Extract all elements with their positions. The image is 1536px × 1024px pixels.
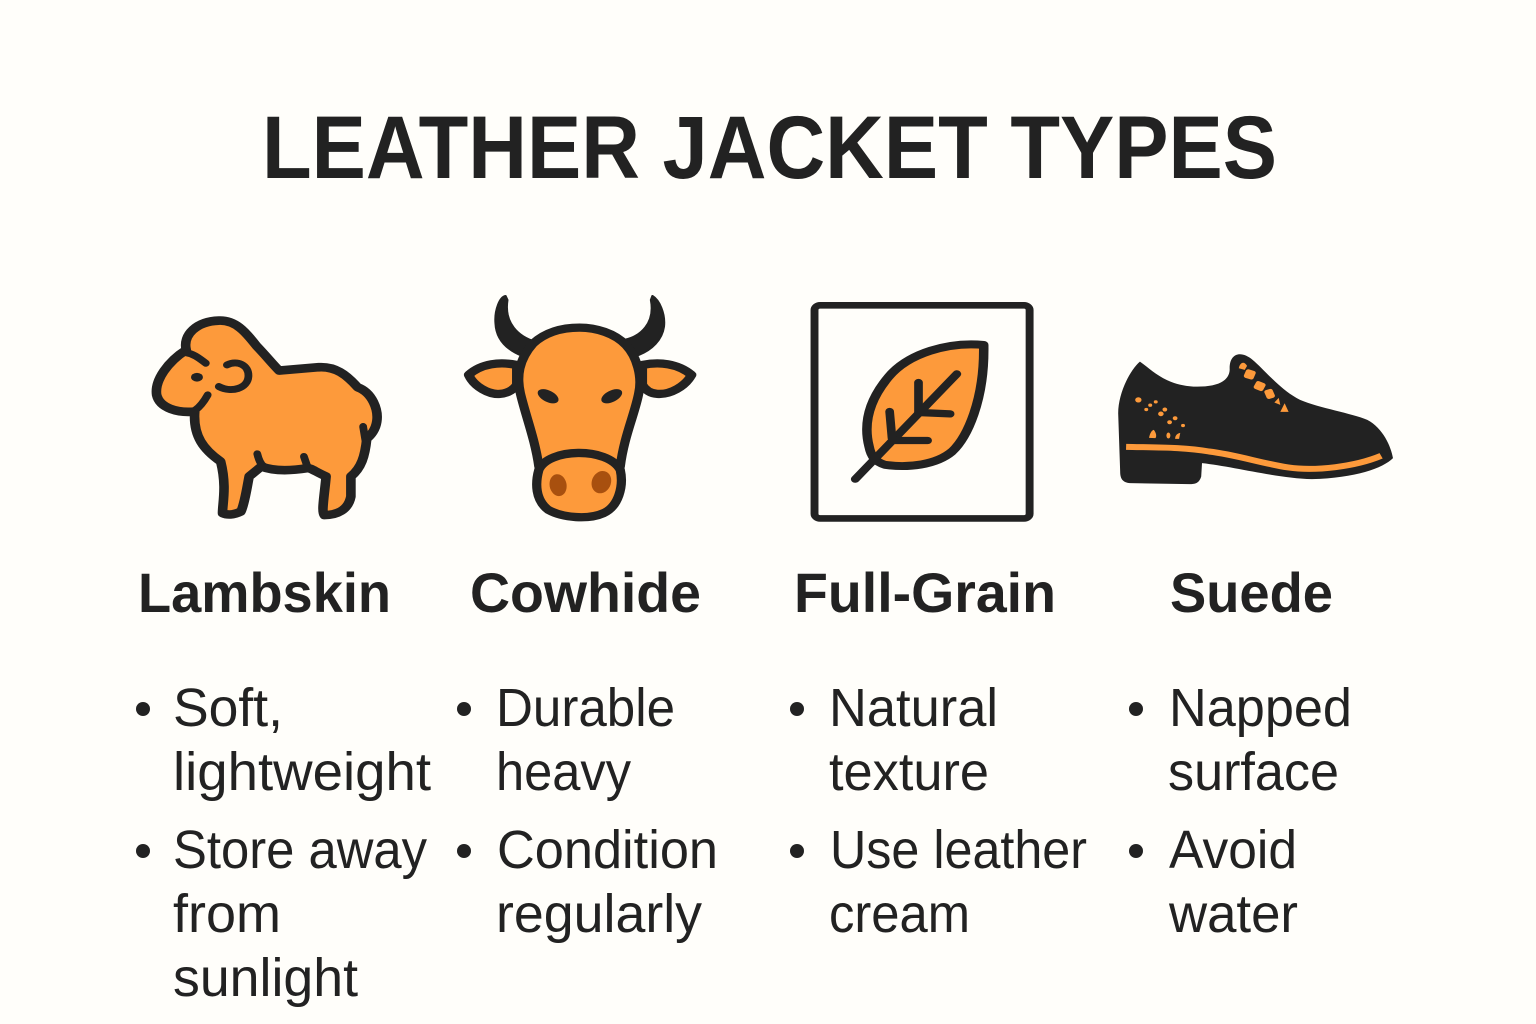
icon: cowhide cow head (469, 296, 692, 517)
list: Cowhide notes: heavy (496, 742, 631, 802)
title: LEATHER JACKET TYPES (262, 97, 1277, 197)
heading: Suede: Suede (1170, 561, 1333, 624)
list: Cowhide notes: Durable (496, 678, 675, 738)
heading: Cowhide: Cowhide (470, 561, 701, 624)
list: Suede notes: Avoid (1169, 820, 1297, 880)
heading: Full-Grain: Full-Grain (794, 561, 1056, 624)
list: Full-Grain notes (790, 678, 1087, 944)
icon: suede shoe (1118, 354, 1393, 484)
list: Lambskin notes: Soft, (173, 678, 283, 738)
list: Suede notes: surface (1168, 742, 1339, 802)
list: Suede notes (1129, 678, 1352, 944)
list: Suede notes: Napped (1169, 678, 1352, 738)
list: Full-Grain notes: cream (829, 884, 970, 944)
list: Cowhide notes (457, 678, 718, 944)
icon: lambskin sheep (156, 321, 377, 515)
list: Full-Grain notes: texture (829, 742, 989, 802)
list: Cowhide notes: Condition (497, 820, 718, 880)
list: Lambskin notes: from (173, 884, 281, 944)
list: Lambskin notes: Store away (173, 820, 427, 880)
list: Suede notes: water (1168, 884, 1298, 944)
list: Lambskin notes: lightweight (173, 742, 431, 802)
list: Cowhide notes: regularly (496, 884, 702, 944)
icon: full-grain leaf in square (815, 305, 1030, 518)
heading: Lambskin: Lambskin (138, 561, 391, 624)
list: Lambskin notes: sunlight (173, 948, 358, 1008)
list: Full-Grain notes: Use leather (830, 820, 1087, 880)
list: Lambskin notes (136, 678, 431, 1008)
list: Full-Grain notes: Natural (829, 678, 998, 738)
